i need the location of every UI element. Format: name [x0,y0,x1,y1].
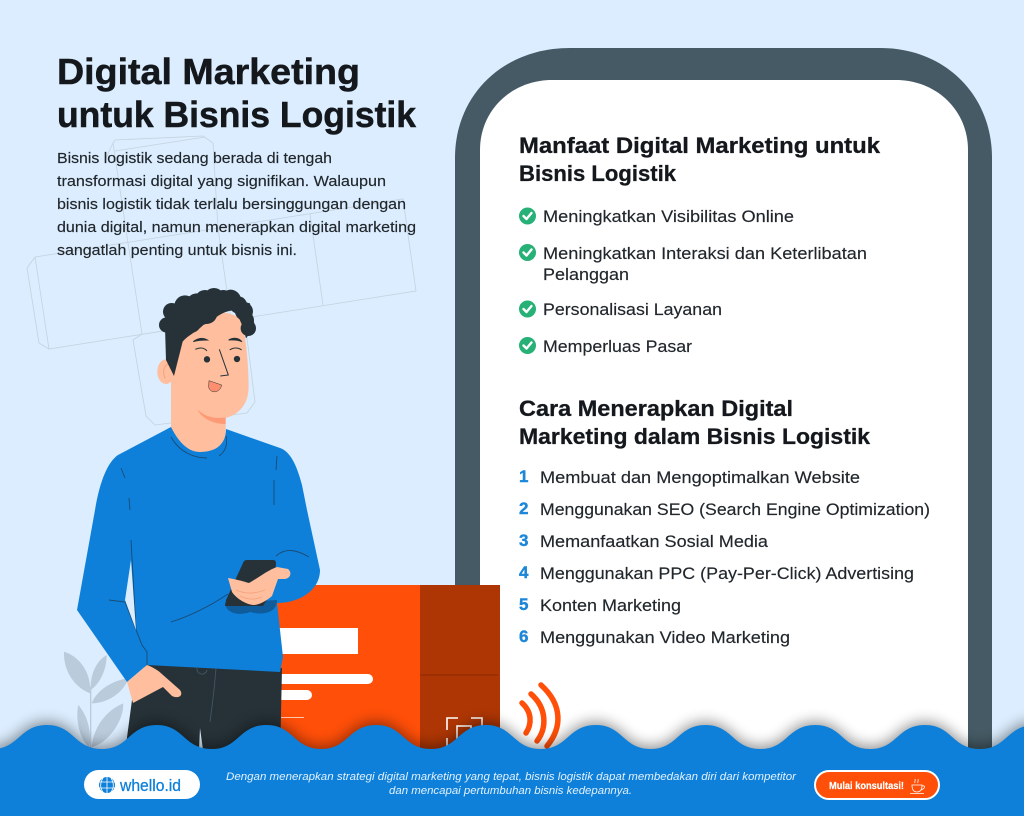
list numbers: 4 [519,563,529,582]
phone shadow [225,600,277,614]
intro paragraph: dunia digital, namun menerapkan digital marketing [57,219,416,236]
list text: Konten Marketing [540,596,681,615]
benefits text: Meningkatkan Visibilitas Online [543,207,794,226]
list text: Membuat dan Mengoptimalkan Website [540,468,860,487]
consult button: Mulai konsultasi! [829,781,904,792]
footer wave band [0,725,1024,816]
phone body [455,48,992,780]
background box net outline [27,136,416,425]
intro paragraph [57,150,416,259]
heading: benefits: Manfaat Digital Marketing untuk [519,133,881,158]
ear [157,359,175,384]
footer message: Dengan menerapkan strategi digital marketing yang tepat, bisnis logistik dapat membedakan diri dari kompetitor [226,771,797,783]
heading: benefits: Bisnis Logistik [519,161,676,186]
benefits text: Pelanggan [543,265,629,284]
benefits text: Memperluas Pasar [543,337,692,356]
list numbers [519,467,529,646]
title: untuk Bisnis Logistik [57,94,417,135]
pants [124,660,282,760]
person illustration [77,288,320,760]
list numbers: 5 [519,595,528,614]
footer message: dan mencapai pertumbuhan bisnis kedepannya. [389,785,632,797]
heading: how to apply: Cara Menerapkan Digital [519,396,793,421]
hair [159,288,256,376]
holding hand [228,567,290,605]
list text: Menggunakan PPC (Pay-Per-Click) Advertising [540,564,914,583]
list text: Menggunakan SEO (Search Engine Optimization) [540,500,930,519]
list text: Menggunakan Video Marketing [540,628,790,647]
benefits text: Meningkatkan Interaksi dan Keterlibatan [543,244,867,263]
heading: how to apply: Marketing dalam Bisnis Logistik [519,424,870,449]
check icons [519,208,536,354]
panel: phone frame [455,48,992,780]
phone screen [480,80,968,780]
intro paragraph: transformasi digital yang signifikan. Walaupun [57,173,386,190]
footer message [226,771,797,797]
benefits text [543,207,867,356]
facial features [193,338,242,392]
heading: benefits [519,133,881,186]
logo text: whello.id [119,776,181,795]
face and neck [171,312,249,460]
icon: globe [99,777,115,793]
sweater [77,427,320,682]
list numbers: 6 [519,627,528,646]
hand in pocket [127,665,181,703]
consult button [815,771,939,799]
list numbers: 1 [519,467,528,486]
smartphone [225,560,276,606]
benefits list [519,207,867,356]
intro paragraph: sangatlah penting untuk bisnis ini. [57,242,297,259]
plant leaves [64,652,128,750]
list text: Memanfaatkan Sosial Media [540,532,769,551]
heading: how to apply [519,396,870,449]
numbered list [519,467,930,647]
list text [540,468,930,647]
icon: coffee cup [910,779,924,794]
intro paragraph: bisnis logistik tidak terlalu bersinggungan dengan [57,196,406,213]
list numbers: 3 [519,531,528,550]
list numbers: 2 [519,499,528,518]
logo pill [84,770,200,799]
sweater gap and fold lines [109,436,309,665]
title [57,51,417,135]
icon: signal waves [522,685,558,746]
footer wave shadow [0,722,1024,816]
benefits text: Personalisasi Layanan [543,300,722,319]
pants details [197,668,216,722]
parcel box [270,585,500,755]
intro paragraph: Bisnis logistik sedang berada di tengah [57,150,332,167]
title: Digital Marketing [57,51,360,92]
